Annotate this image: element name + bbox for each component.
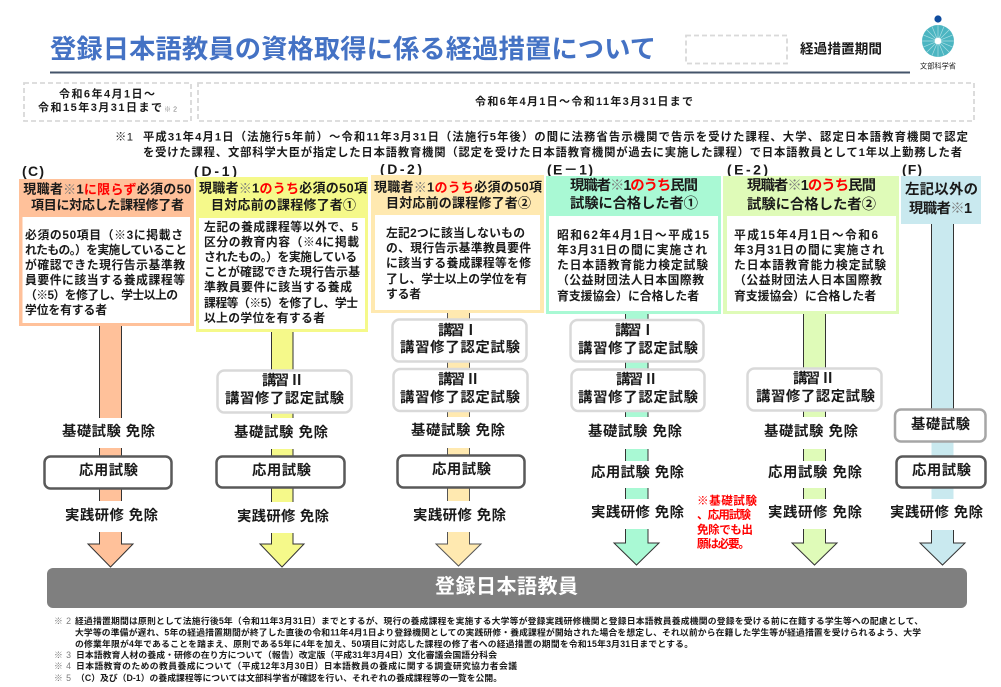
panel D-2: する者 <box>386 287 421 301</box>
basic exam exempt C: 基礎試験 免除 <box>62 422 156 440</box>
panel C: 必須の50項目（※3に掲載さ <box>25 228 183 242</box>
applied exam D-1 <box>216 456 344 488</box>
applied exam D-1: 応用試験 <box>252 462 312 479</box>
course II D-2 <box>394 369 528 411</box>
panel D-1: ことが確認できた現行告示基 <box>204 265 360 279</box>
basic exam exempt E-1: 基礎試験 免除 <box>588 422 683 440</box>
practicum exempt C: 実践研修 免除 <box>65 506 159 524</box>
icon: MEXT logo: 文部科学省 <box>920 62 956 70</box>
course I D-2: 講習 Ⅰ <box>438 321 478 339</box>
flow stem and arrow C <box>88 326 133 567</box>
period box: left: 令和6年4月1日～ <box>59 86 155 100</box>
panel E-1 <box>546 176 721 314</box>
panel E-2: た日本語教育能力検定試験 <box>734 258 886 272</box>
panel D-1 <box>196 177 368 332</box>
flow stem and arrow D-2 <box>436 313 481 566</box>
course II D-1: 講習修了認定試験 <box>225 389 345 407</box>
column E-2 <box>723 162 899 565</box>
column E-1 <box>546 162 721 565</box>
result bar: 登録日本語教員 <box>435 575 578 598</box>
red caution note <box>697 494 757 550</box>
panel C: 員要件に該当する養成課程等 <box>25 273 185 287</box>
panel D-1: 区分の教育内容（※4に掲載 <box>204 235 359 249</box>
column E-1: (E－1) <box>547 162 593 178</box>
panel D-2: の、現行告示基準教員要件 <box>386 241 531 255</box>
applied exam D-2: 応用試験 <box>432 461 492 478</box>
column D-1: (D-1) <box>194 163 237 179</box>
footnotes: （C）及び（D-1）の養成課程等については文部科学省が確認を行い、それぞれの養成課程等の一覧を公開。 <box>76 672 502 683</box>
course I D-2: 講習修了認定試験 <box>400 338 521 356</box>
panel D-2 <box>371 175 544 313</box>
legend: transition period <box>686 36 882 64</box>
course I D-2 <box>392 320 526 362</box>
flow stem and arrow F <box>920 224 965 565</box>
panel C: 学位を有する者 <box>25 303 107 317</box>
flow stem and arrow E-2 <box>792 314 837 565</box>
period box: right: 令和6年4月1日～令和11年3月31日まで <box>475 94 693 108</box>
footnotes: 大学等の準備が遅れ、5年の経過措置期間が終了した直後の令和11年4月1日より登録機関としての実践研修・養成課程が開始された場合を想定し、それ以前から在籍した学生等が経過措置を受けられるよう、大学 <box>75 626 921 638</box>
panel D-2: に該当する養成課程等を修 <box>386 256 531 270</box>
icon: MEXT logo <box>920 15 956 70</box>
applied exam exempt E-1: 応用試験 免除 <box>591 463 685 481</box>
red caution note: ※基礎試験 <box>697 494 757 508</box>
panel C: 項目に対応した課程修了者 <box>31 198 184 212</box>
panel E-2: 現職者※1のうち民間 <box>747 177 876 194</box>
column F: (F) <box>902 162 922 178</box>
course II E-2 <box>748 368 882 410</box>
applied exam exempt E-2: 応用試験 免除 <box>768 463 863 481</box>
title: 登録日本語教員の資格取得に係る経過措置について <box>50 34 656 64</box>
column D-2: (D-2) <box>380 161 422 177</box>
panel E-1: 現職者※1のうち民間 <box>570 177 698 194</box>
red caution note: 免除でも出 <box>697 522 753 536</box>
panel E-2: 年3月31日の間に実施され <box>734 243 884 257</box>
basic exam exempt D-2: 基礎試験 免除 <box>411 421 506 439</box>
panel D-1: 以上の学位を有する者 <box>204 311 325 325</box>
panel F: 左記以外の <box>905 181 978 198</box>
panel E-2 <box>723 176 899 314</box>
footnotes: 日本語教育人材の養成・研修の在り方について（報告）改定版（平成31年3月4日）文化審議会国語分科会 <box>76 649 497 660</box>
applied exam C <box>44 456 172 488</box>
panel E-1: 育支援協会）に合格した者 <box>557 289 699 303</box>
footnotes: ※5 <box>54 673 71 683</box>
legend: transition period: 経過措置期間 <box>800 40 882 56</box>
panel E-1: 試験に合格した者① <box>570 194 698 212</box>
panel C: が確認できた現行告示基準教 <box>25 258 185 272</box>
course II D-1: 講習 Ⅱ <box>262 371 304 389</box>
period box: left: ※2 <box>164 106 177 114</box>
course II E-1: 講習修了認定試験 <box>578 388 699 406</box>
panel C: れたもの。）を実施していること <box>25 243 187 257</box>
panel D-1: 現職者※1のうち必須の50項 <box>199 180 367 196</box>
panel E-1: 年3月31日の間に実施され <box>557 243 707 257</box>
footnotes: ※4 <box>54 661 71 671</box>
period box: right <box>198 83 974 121</box>
applied exam F: 応用試験 <box>912 462 972 479</box>
practicum exempt E-2: 実践研修 免除 <box>768 503 863 521</box>
panel C: 現職者※1に限らず必須の50 <box>23 182 191 196</box>
panel E-1: 昭和62年4月1日～平成15 <box>557 228 709 242</box>
basic exam exempt D-1: 基礎試験 免除 <box>234 423 329 441</box>
column F <box>890 162 986 565</box>
panel D-2: 左記2つに該当しないもの <box>386 226 525 240</box>
note 1: ※1 <box>115 132 133 144</box>
panel E-1: （公益財団法人日本国際教 <box>557 273 704 287</box>
column C: (C) <box>22 163 44 179</box>
practicum exempt D-2: 実践研修 免除 <box>413 506 507 524</box>
course II D-2: 講習修了認定試験 <box>400 388 521 406</box>
footnotes: 日本語教育のための教員養成について（平成12年3月30日）日本語教員の養成に関する調査研究協力者会議 <box>76 660 517 671</box>
course I E-1: 講習修了認定試験 <box>578 339 699 357</box>
panel F <box>901 176 981 224</box>
practicum exempt E-1: 実践研修 免除 <box>591 503 685 521</box>
panel E-1: た日本語教育能力検定試験 <box>557 258 708 272</box>
flow stem and arrow E-1 <box>614 314 659 565</box>
footnotes <box>54 615 923 683</box>
note 1: を受けた課程、文部科学大臣が指定した日本語教育機関（認定を受けた日本語教育機関が過去に実施した課程）で日本語教員として1年以上勤務した者 <box>143 145 962 159</box>
footnotes: ※2 <box>54 616 71 626</box>
panel C <box>19 179 194 326</box>
column D-2 <box>371 161 544 566</box>
panel E-2: 育支援協会）に合格した者 <box>734 289 876 303</box>
applied exam C: 応用試験 <box>79 462 139 479</box>
period box: left: 令和15年3月31日まで <box>38 100 162 114</box>
applied exam F <box>896 456 986 488</box>
footnotes: 経過措置期間は原則として法施行後5年（令和11年3月31日）までとするが、現行の養成課程を実施する大学等が登録実践研修機関と登録日本語教員養成機関の登録を受ける前に在籍する学生等への配慮として、 <box>75 615 923 626</box>
panel D-2: 現職者※1のうち必須の50項 <box>374 180 542 194</box>
course II D-2: 講習 Ⅱ <box>438 370 480 388</box>
course I E-1: 講習 Ⅰ <box>615 321 655 339</box>
result bar <box>47 568 967 608</box>
note 1: 平成31年4月1日（法施行5年前）～令和11年3月31日（法施行5年後）の間に法務省告示機関で告示を受けた課程、大学、認定日本語教育機関で認定 <box>143 130 968 144</box>
red caution note: 願は必要。 <box>697 536 750 550</box>
panel E-2: 試験に合格した者② <box>747 195 876 213</box>
panel D-1: 準教員要件に該当する養成 <box>204 280 352 294</box>
column C <box>19 163 194 567</box>
column E-2: (E-2) <box>727 162 768 178</box>
panel D-1: 目対応前の課程修了者① <box>211 198 356 212</box>
basic exam exempt E-2: 基礎試験 免除 <box>764 422 859 440</box>
footnotes: の修業年限が4年であることを踏まえ、原則である5年に4年を加え、50項目に対応した課程の修了者への経過措置の期間を令和15年3月31日までとする。 <box>75 638 693 649</box>
panel D-1: されたもの。）を実施している <box>204 250 357 264</box>
course II E-1 <box>572 370 704 411</box>
applied exam D-2 <box>398 456 524 488</box>
course II D-1 <box>218 370 352 412</box>
flow stem and arrow D-1 <box>260 332 304 567</box>
course II E-2: 講習修了認定試験 <box>756 387 876 405</box>
practicum exempt F: 実践研修 免除 <box>890 503 984 521</box>
basic exam F <box>895 410 986 442</box>
panel D-1: 課程等（※5）を修了し、学士 <box>204 296 358 310</box>
panel D-1: 左記の養成課程等以外で、5 <box>204 220 358 234</box>
basic exam F: 基礎試験 <box>911 415 971 433</box>
panel E-2: （公益財団法人日本国際教 <box>734 273 882 287</box>
course II E-1: 講習 Ⅱ <box>616 370 658 388</box>
panel D-2: 目対応前の課程修了者② <box>386 196 531 210</box>
panel D-2: 了し、学士以上の学位を有 <box>386 272 527 286</box>
footnotes: ※3 <box>54 650 71 660</box>
practicum exempt D-1: 実践研修 免除 <box>237 507 330 525</box>
red caution note: 、応用試験 <box>697 508 751 522</box>
course II E-2: 講習 Ⅱ <box>793 369 835 387</box>
panel F: 現職者※1 <box>909 200 972 217</box>
period box: left <box>24 83 191 121</box>
column D-1 <box>194 163 368 567</box>
note 1 <box>115 130 968 159</box>
panel E-2: 平成15年4月1日～令和6 <box>734 228 878 242</box>
panel C: （※5）を修了し、学士以上の <box>25 288 178 302</box>
course I E-1 <box>570 320 704 362</box>
